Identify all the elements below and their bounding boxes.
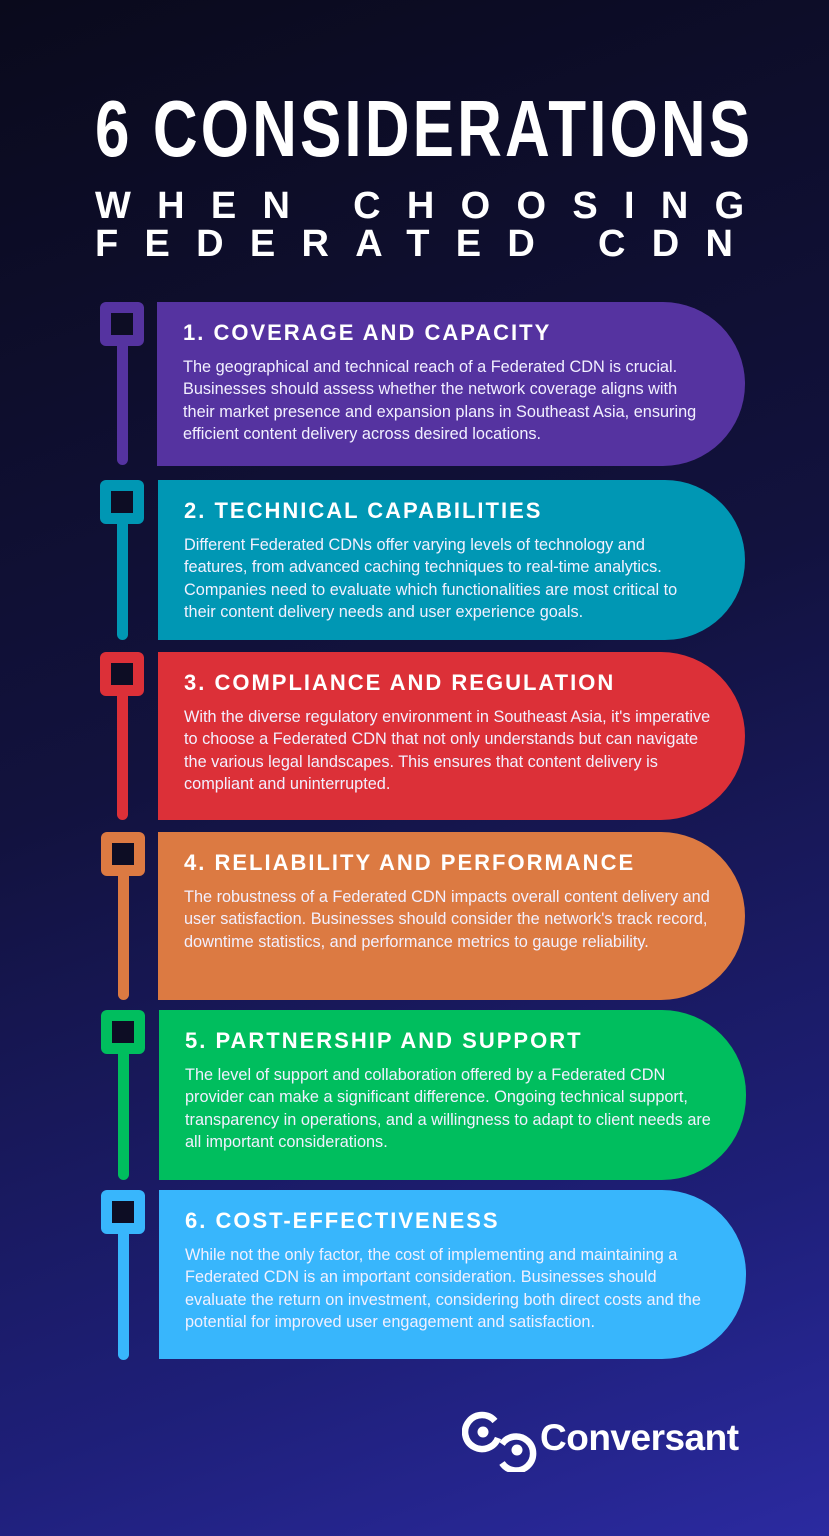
panel 4: 4. RELIABILITY AND PERFORMANCE: [184, 850, 635, 875]
panel 5: 5. PARTNERSHIP AND SUPPORT: [185, 1028, 583, 1053]
panel 6: [159, 1190, 746, 1359]
panel 5: The level of support and collaboration offered by a Federated CDN provider can make a significant difference. Ongoing technical support, transparency in operations, and a willingness to adapt to client needs are all important considerations.: [185, 1066, 711, 1151]
panel 1: [157, 302, 745, 466]
logo text: Conversant: [540, 1417, 739, 1458]
panel 4: [158, 832, 745, 1000]
marker 4: [101, 832, 145, 1000]
panel 1: 1. COVERAGE AND CAPACITY: [183, 320, 551, 345]
panel 2: [158, 480, 745, 640]
panel 5: [159, 1010, 746, 1180]
panel 3: With the diverse regulatory environment in Southeast Asia, it's imperative to choose a Federated CDN that not only understands but can navigate the various legal landscapes. This ensures that content delivery is compliant and uninterrupted.: [184, 708, 710, 793]
marker 5: [101, 1010, 145, 1180]
marker 3: [100, 652, 144, 820]
panel 2: Different Federated CDNs offer varying levels of technology and features, from advanced caching techniques to real-time analytics. Companies need to evaluate which functionalities are most critical to their content delivery needs and user experience goals.: [184, 536, 677, 621]
panel 1: The geographical and technical reach of a Federated CDN is crucial. Businesses should assess whether the network coverage aligns with their market presence and expansion plans in Southeast Asia, ensuring efficient content delivery across desired locations.: [183, 358, 696, 443]
logo: [462, 1412, 739, 1472]
marker 6: [101, 1190, 145, 1360]
icon: logo mark: [462, 1412, 536, 1472]
panel 2: 2. TECHNICAL CAPABILITIES: [184, 498, 542, 523]
subtitle line 1: WHEN CHOOSING: [95, 185, 770, 227]
title: 6 CONSIDERATIONS: [95, 84, 753, 173]
marker 1: [100, 302, 144, 465]
marker 2: [100, 480, 144, 640]
panel 3: [158, 652, 745, 820]
panel 6: 6. COST-EFFECTIVENESS: [185, 1208, 500, 1233]
panel 3: 3. COMPLIANCE AND REGULATION: [184, 670, 615, 695]
panel 6: While not the only factor, the cost of implementing and maintaining a Federated CDN is an important consideration. Businesses should evaluate the return on investment, considering both direct costs and the potential for improved user engagement and satisfaction.: [185, 1246, 701, 1331]
subtitle line 2: FEDERATED CDN: [95, 223, 759, 265]
panel 4: The robustness of a Federated CDN impacts overall content delivery and user satisfaction. Businesses should consider the network's track record, downtime statistics, and performance metrics to gauge reliability.: [184, 888, 710, 951]
